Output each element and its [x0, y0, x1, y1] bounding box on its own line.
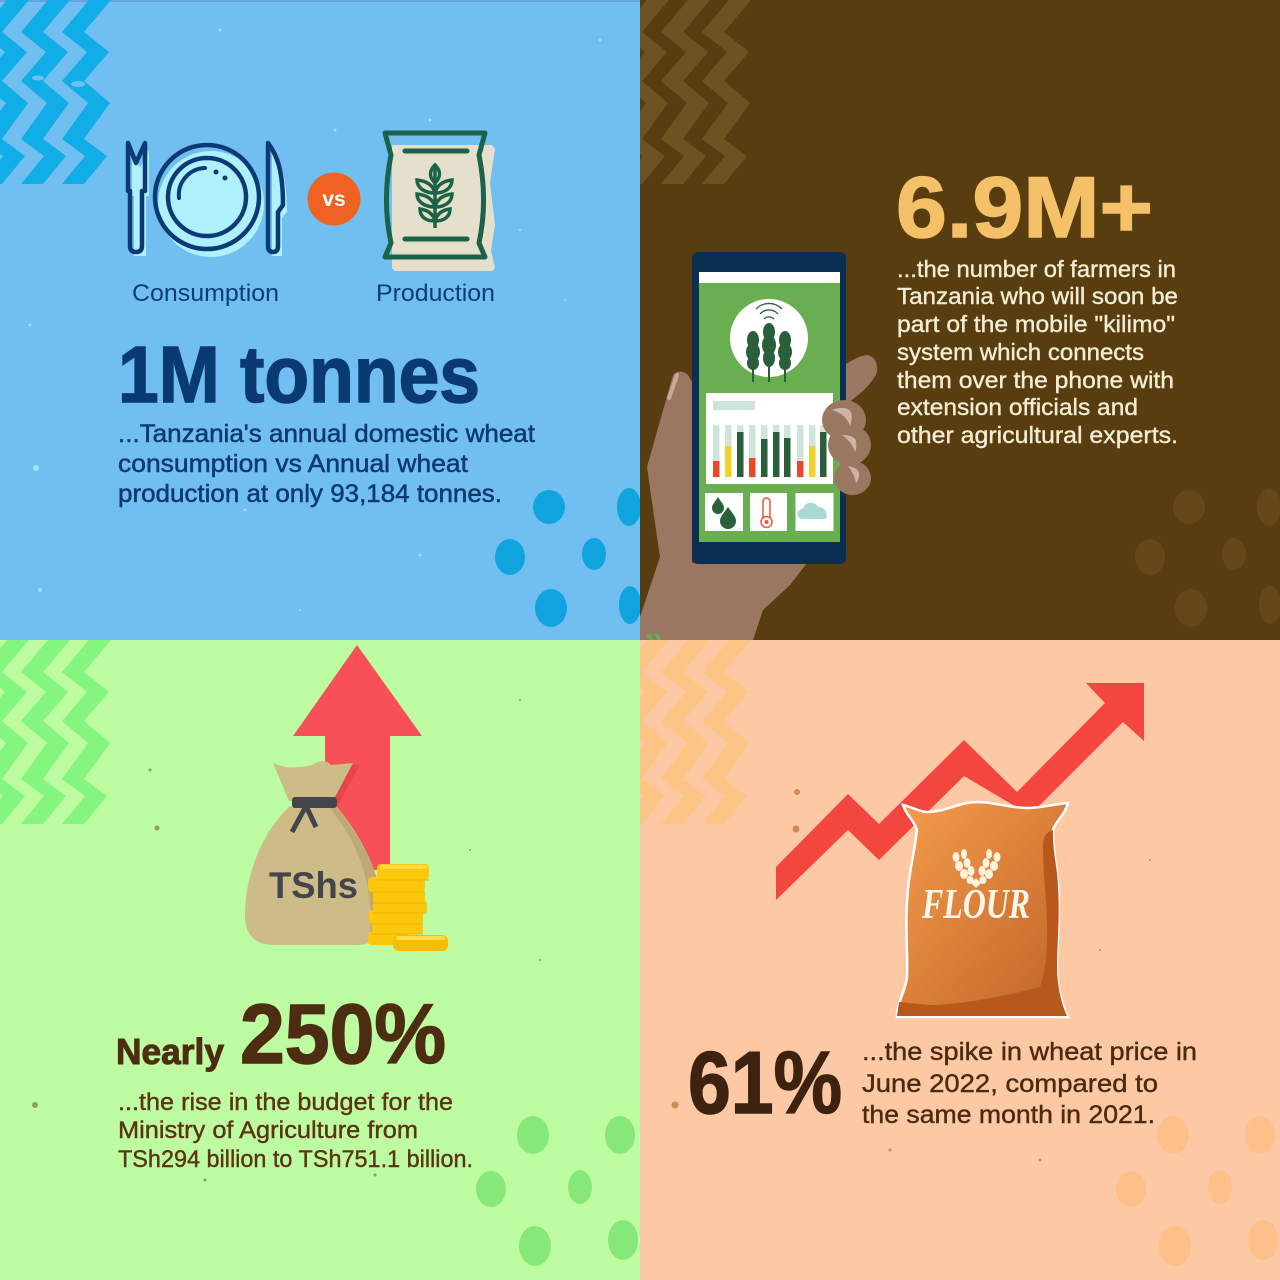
text block: price description: ...the spike in wheat price in: [862, 1038, 1197, 1066]
sack label: FLOUR: [921, 882, 1030, 928]
paw dots: [1116, 1116, 1278, 1266]
stat: nearly 250%: [118, 1003, 445, 1072]
specks: [28, 28, 602, 611]
app bar chart: [706, 393, 833, 484]
icon: red up arrow: [293, 645, 422, 870]
stat: 1M tonnes: 1M tonnes: [118, 330, 480, 419]
stat: 61%: 61%: [688, 1033, 842, 1132]
icon: money bag: [245, 761, 383, 945]
text block: budget description: Ministry of Agriculture from: [118, 1117, 418, 1144]
phone body: [692, 252, 846, 564]
icon: vs badge: [308, 172, 360, 226]
text block: budget description: TSh294 billion to TSh751.1 billion.: [118, 1146, 473, 1173]
text block: kilimo description: extension officials and: [897, 394, 1138, 420]
text block: kilimo description: system which connects: [897, 339, 1144, 365]
icon: rising line arrow: [776, 683, 1144, 900]
stat: nearly 250%: Nearly: [116, 1031, 224, 1072]
bracelet: [646, 633, 662, 640]
stat: 6.9M+: 6.9M+: [896, 160, 1153, 256]
icon: wheat sack: [385, 133, 495, 271]
panel: mobile kilimo farmers: [620, 0, 1280, 640]
chevron pattern: [0, 0, 111, 184]
text block: budget description: ...the rise in the budget for the: [118, 1089, 453, 1116]
icon: flour sack: [897, 802, 1068, 1017]
panel: wheat price spike: [620, 640, 1280, 1280]
icon: hand holding phone: [640, 252, 877, 640]
paw dots: [1135, 488, 1280, 627]
paw dots: [495, 488, 641, 627]
icon: plate and cutlery: [128, 143, 287, 257]
fingers: [822, 400, 871, 495]
text block: budget description: [118, 1092, 472, 1168]
text block: kilimo description: [897, 256, 1178, 448]
bag label: TShs: [269, 865, 358, 906]
stat: nearly 250%: 250%: [240, 987, 446, 1081]
text block: kilimo description: them over the phone with: [897, 367, 1174, 393]
text block: consumption description: consumption vs Annual wheat: [118, 450, 468, 478]
text block: consumption description: [118, 420, 535, 508]
text block: kilimo description: ...the number of farmers in: [897, 256, 1176, 282]
wheat app logo: [753, 303, 785, 382]
panel: budget rise: [0, 640, 640, 1280]
panel: consumption vs production: [0, 0, 641, 640]
text block: price description: the same month in 2021.: [862, 1101, 1155, 1129]
paw dots: [476, 1116, 638, 1266]
chevron pattern: [0, 640, 111, 824]
chevron pattern: [640, 640, 751, 824]
text block: price description: [862, 1038, 1197, 1129]
icon: gold coins: [368, 864, 448, 951]
specks: [32, 699, 541, 1182]
app tiles: [705, 493, 834, 531]
text block: consumption description: production at only 93,184 tonnes.: [118, 480, 502, 508]
wheat emblem: [952, 849, 1000, 888]
text block: consumption description: ...Tanzania's annual domestic wheat: [118, 420, 535, 448]
text block: kilimo description: Tanzania who will soon be: [897, 283, 1178, 309]
chevron pattern: [640, 0, 751, 184]
text block: kilimo description: part of the mobile "kilimo": [897, 311, 1175, 337]
label: consumption: Consumption: [132, 280, 279, 307]
text block: kilimo description: other agricultural experts.: [897, 422, 1178, 448]
text block: price description: June 2022, compared to: [862, 1070, 1158, 1098]
icon: vs badge: vs: [322, 188, 346, 211]
label: production: Production: [376, 280, 495, 307]
specks: [672, 789, 1151, 1162]
